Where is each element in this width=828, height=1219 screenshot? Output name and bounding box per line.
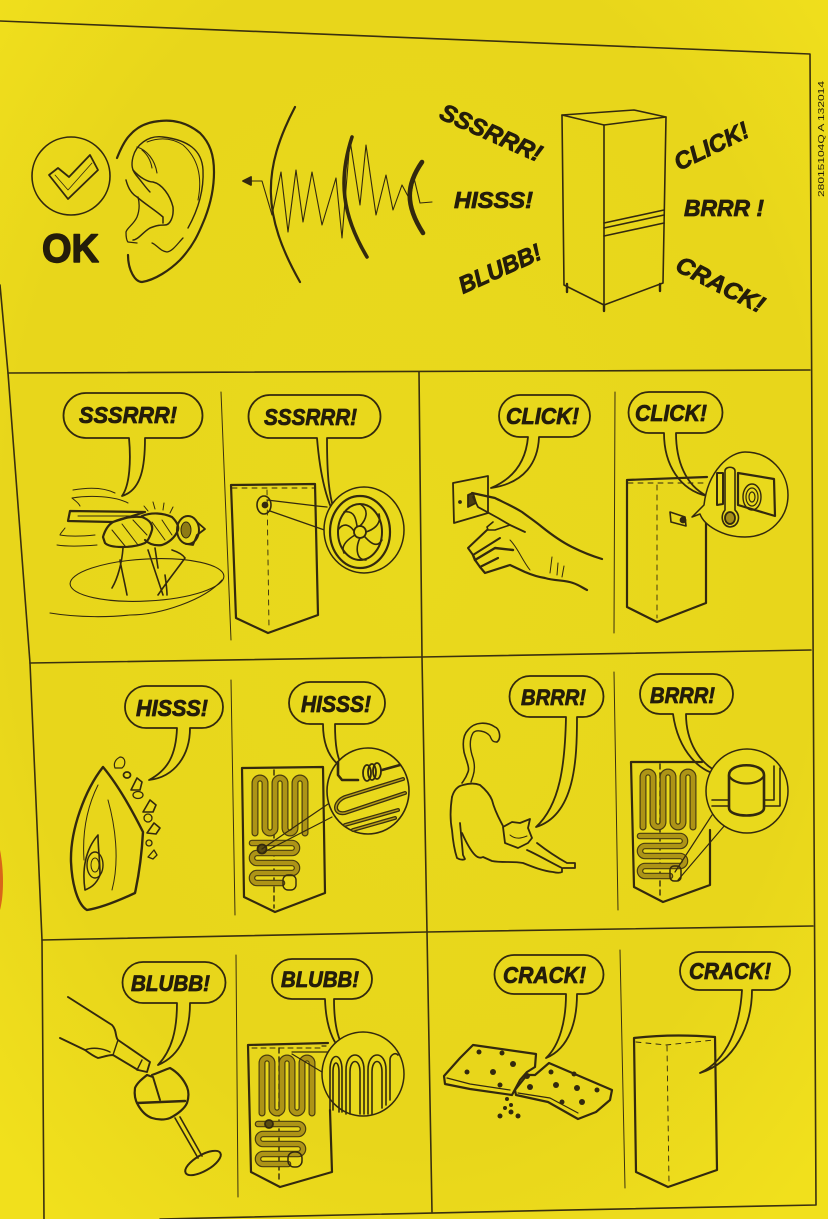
speech bubble: crack cabinet — [680, 952, 790, 1073]
speech bubble: hisss condenser: HISSS! — [301, 691, 371, 717]
icon: fridge with compressor — [631, 749, 788, 902]
icon: fridge — [562, 110, 666, 311]
panel: cat vs compressor — [450, 674, 788, 902]
panel: wine vs coils — [60, 959, 404, 1187]
icon: fridge with fan — [231, 484, 404, 633]
icon: stretching cat — [450, 723, 575, 873]
noise labels: HISSS! — [454, 187, 533, 213]
speech bubble: crack crackers — [494, 955, 604, 1058]
speech bubble: brrr compressor — [640, 674, 733, 775]
speech bubble: click switch: CLICK! — [506, 403, 579, 429]
speech bubble: brrr cat — [509, 676, 604, 827]
noise labels: CLICK! — [670, 117, 754, 176]
speech bubble: blubb coils: BLUBB! — [281, 967, 359, 992]
speech bubble: blubb wine: BLUBB! — [131, 971, 210, 996]
icon: fridge cabinet — [634, 1036, 717, 1187]
panel: switch vs thermostat — [453, 392, 788, 622]
speech bubble: sssrrr fan: SSSRRR! — [264, 404, 357, 430]
panel: fly vs fan — [50, 393, 404, 633]
speech bubble: sssrrr fly: SSSRRR! — [79, 402, 177, 428]
speech bubble: hisss condenser — [289, 682, 385, 768]
speech bubble: click thermostat: CLICK! — [635, 400, 707, 426]
icon: fridge with coil closeup — [248, 1032, 404, 1187]
speech bubble: sssrrr fan — [248, 395, 380, 520]
noise labels: BRRR ! — [684, 195, 764, 221]
icon: light switch and hand — [453, 476, 602, 590]
icon: ear — [117, 121, 214, 282]
icon: fridge with thermostat — [627, 452, 788, 622]
icon: broken cracker — [444, 1045, 612, 1119]
speech bubble: crack cabinet: CRACK! — [689, 958, 771, 984]
speech bubble: hisss iron — [125, 686, 223, 780]
noise labels — [436, 99, 769, 319]
speech bubble: brrr compressor: BRRR! — [650, 683, 715, 708]
side print code: 28015104Q A 132014 — [817, 80, 826, 197]
icon: fly — [50, 488, 225, 617]
noise labels: CRACK! — [671, 251, 769, 319]
panel: crackers vs cabinet — [444, 952, 790, 1187]
panel: iron vs condenser — [71, 682, 409, 912]
noise labels: BLUBB! — [454, 239, 546, 299]
speech bubble: click thermostat — [628, 392, 722, 496]
speech bubble: hisss iron: HISSS! — [136, 695, 208, 721]
speech bubble: click switch — [491, 395, 590, 488]
speech bubble: brrr cat: BRRR! — [521, 685, 586, 710]
speech bubble: blubb coils — [272, 959, 372, 1057]
icon: bottle and wine glass — [60, 997, 224, 1180]
speech bubble: sssrrr fly — [64, 393, 202, 496]
speech bubble: crack crackers: CRACK! — [503, 962, 586, 988]
page edge shadow — [0, 850, 3, 910]
icon: sound wave — [243, 107, 432, 282]
heading: OK: OK — [42, 227, 99, 271]
icon: steam iron — [71, 757, 160, 910]
noise labels: SSSRRR! — [436, 99, 546, 168]
speech bubble: blubb wine — [122, 962, 226, 1065]
icon: ok check — [32, 137, 110, 215]
icon: fridge with coil detail — [242, 748, 409, 912]
panel: overview — [32, 99, 769, 319]
